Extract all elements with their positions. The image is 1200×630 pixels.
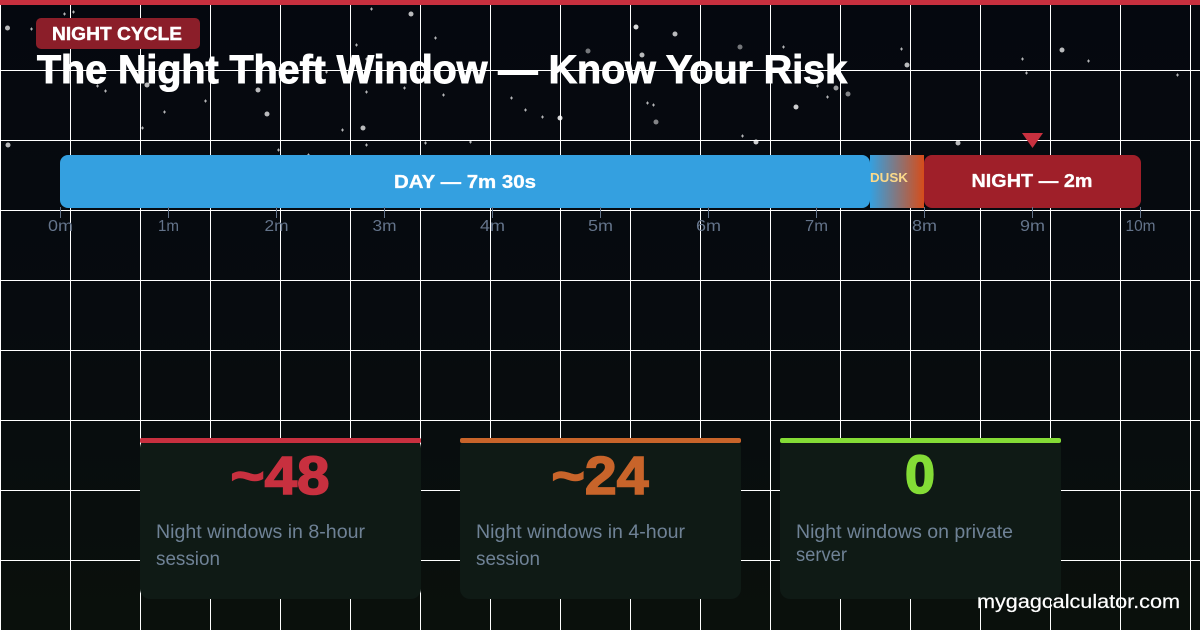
card: private server: [780, 438, 1061, 599]
star field: [5, 8, 1179, 156]
card: 8-hour session: Night windows in 8-hour: [156, 522, 366, 543]
top accent bar: [0, 0, 1200, 5]
card: 4-hour session: session: [476, 549, 540, 570]
segment: dusk: [870, 155, 924, 208]
segment: night: NIGHT — 2m: [972, 171, 1092, 191]
night marker arrow: [1022, 133, 1043, 148]
title: The Night Theft Window — Know Your Risk: [37, 48, 848, 92]
badge: night cycle: [36, 18, 200, 49]
card: 8-hour session: [140, 438, 421, 599]
card: 8-hour session: ~48: [230, 446, 330, 506]
time axis: 2m: [264, 218, 288, 235]
card: 4-hour session: [460, 438, 741, 599]
time axis: 8m: [912, 218, 937, 235]
segment: day: DAY — 7m 30s: [394, 172, 536, 192]
time axis: [48, 207, 1156, 235]
badge: night cycle: NIGHT CYCLE: [52, 24, 182, 44]
time axis: 6m: [696, 218, 721, 235]
card: private server: server: [796, 545, 848, 566]
segment: dusk: DUSK: [870, 170, 909, 185]
time axis: 9m: [1020, 218, 1045, 235]
card: 4-hour session: Night windows in 4-hour: [476, 522, 686, 543]
footer url: mygagcalculator.com: [977, 592, 1180, 613]
time axis: 10m: [1126, 218, 1156, 235]
time axis: 7m: [805, 218, 828, 235]
time axis: 5m: [588, 218, 613, 235]
timeline bar: [60, 155, 1141, 208]
card: 8-hour session: session: [156, 549, 220, 570]
card: 4-hour session: ~24: [552, 446, 648, 506]
card: private server: 0: [905, 445, 935, 505]
segment: night: [924, 155, 1141, 208]
time axis: 3m: [372, 218, 396, 235]
segment: day: [60, 155, 870, 208]
time axis: 0m: [48, 218, 73, 235]
time axis: 1m: [158, 218, 179, 235]
card: private server: Night windows on private: [796, 522, 1013, 543]
time axis: 4m: [480, 218, 505, 235]
